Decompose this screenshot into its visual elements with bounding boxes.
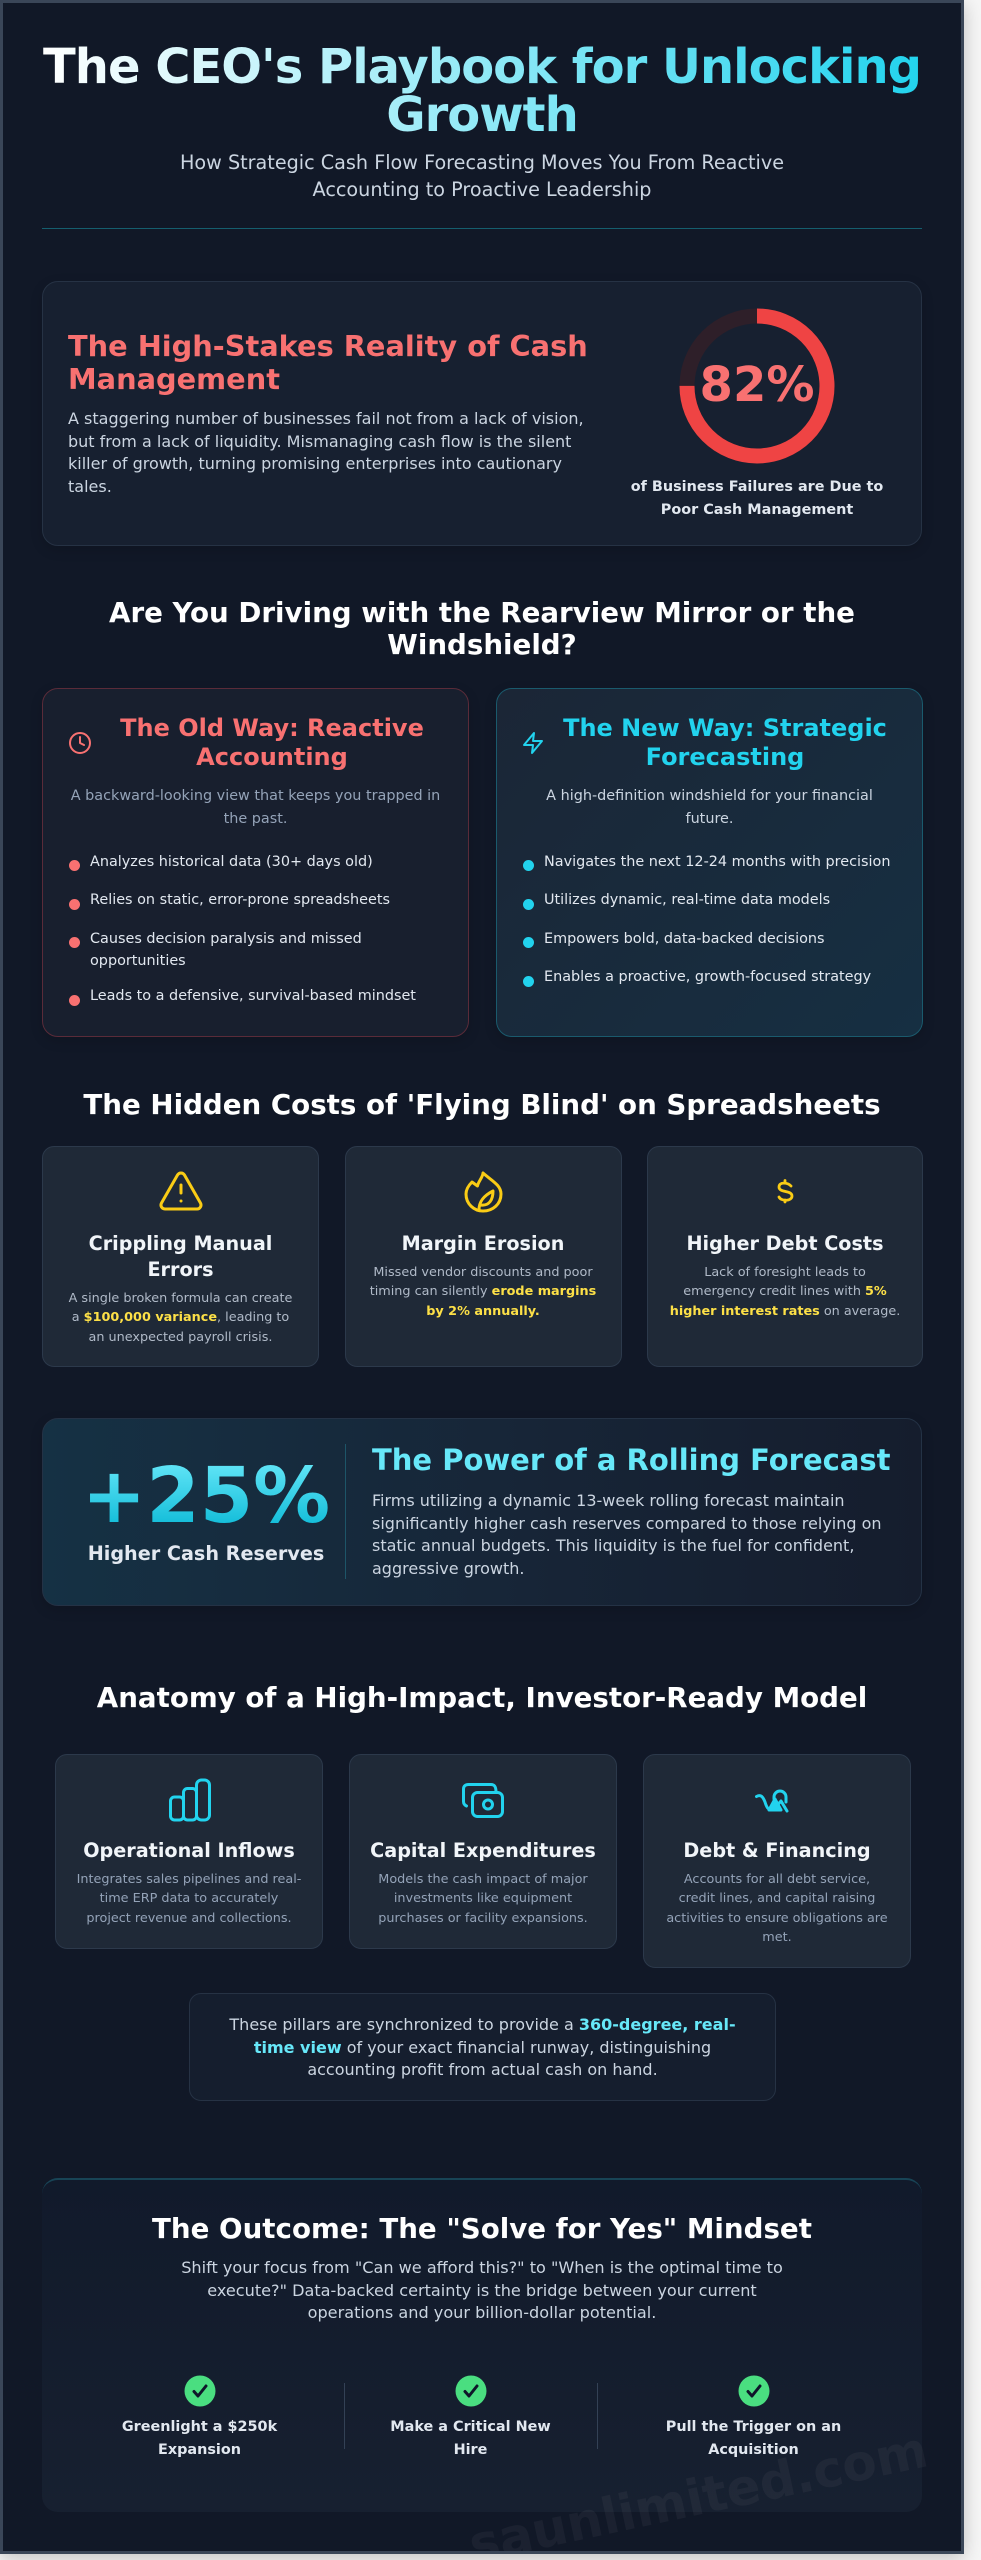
panel: outcome xyxy=(42,2178,922,2512)
label xyxy=(122,2419,278,2458)
text: capital expenditures: investments like equipment xyxy=(394,1891,572,1906)
item 2: Relies on static, error-prone spreadsheets xyxy=(90,892,390,908)
text: new way intro: A high-definition windshield for your financial xyxy=(546,788,873,804)
bullet 3 xyxy=(523,937,534,948)
text: debt costs: higher interest rates on average. xyxy=(670,1304,900,1319)
bullet 3 xyxy=(69,937,80,948)
text: debt and financing xyxy=(666,1872,888,1945)
panel: old way xyxy=(42,688,469,1037)
heading: new way: The New Way: Strategic xyxy=(563,714,887,742)
subtitle xyxy=(180,151,784,201)
text: operational inflows xyxy=(77,1872,301,1926)
heading: high-stakes: The High-Stakes Reality of Cash xyxy=(68,329,588,363)
icon: bar chart xyxy=(169,1778,211,1822)
text: debt and financing: credit lines, and capital raising xyxy=(679,1891,875,1906)
text: manual errors xyxy=(68,1291,292,1345)
heading: old way xyxy=(120,714,424,771)
heading: high-stakes xyxy=(68,329,588,396)
stat caption xyxy=(631,479,883,518)
text: high-stakes body: but from a lack of liquidity. Mismanaging cash flow is the silent xyxy=(68,432,571,451)
icon: lightning xyxy=(523,732,543,754)
item 4: Enables a proactive, growth-focused strategy xyxy=(544,969,871,985)
text: operational inflows: time ERP data to accurately xyxy=(100,1891,278,1906)
text: margin erosion xyxy=(370,1265,596,1319)
heading: new way: Forecasting xyxy=(646,743,804,771)
heading: anatomy: Anatomy of a High-Impact, Investor-Ready Model xyxy=(97,1681,867,1714)
icon: clock xyxy=(69,732,91,754)
panel: margin erosion xyxy=(344,1146,622,1367)
bullet 2 xyxy=(523,899,534,910)
callout: synchronized pillars: These pillars are synchronized to provide a 360-degree, real- xyxy=(229,2015,736,2034)
text: debt and financing: Accounts for all debt service, xyxy=(684,1872,870,1887)
item 3 xyxy=(90,931,362,969)
text: high-stakes body: tales. xyxy=(68,477,112,496)
text: debt and financing: met. xyxy=(762,1930,792,1945)
text: debt costs: Lack of foresight leads to xyxy=(704,1265,866,1280)
stat label: Higher Cash Reserves xyxy=(88,1542,324,1565)
bullet 1 xyxy=(69,860,80,871)
heading: manual errors: Errors xyxy=(147,1258,214,1281)
panel: capital expenditures xyxy=(349,1754,617,1949)
heading: old way: Accounting xyxy=(196,743,348,771)
item 2: Utilizes dynamic, real-time data models xyxy=(544,892,830,908)
outcome item: hire xyxy=(390,2376,551,2458)
text: high-stakes body xyxy=(68,409,584,496)
heading: manual errors xyxy=(89,1232,272,1281)
heading: manual errors: Crippling Manual xyxy=(89,1232,272,1255)
label xyxy=(666,2419,841,2458)
text: capital expenditures: Models the cash impact of major xyxy=(378,1872,588,1887)
panel: high-stakes reality xyxy=(42,281,922,546)
text: manual errors: A single broken formula can create xyxy=(69,1291,292,1306)
text: rolling forecast: significantly higher cash reserves compared to those relying on xyxy=(372,1514,882,1532)
item 3: Empowers bold, data-backed decisions xyxy=(544,931,825,947)
text: rolling forecast: Firms utilizing a dynamic 13-week rolling forecast maintain xyxy=(372,1491,845,1510)
outcome item: acquisition xyxy=(666,2376,841,2458)
icon: dollar xyxy=(778,1179,794,1204)
text: old way intro: A backward-looking view that keeps you trapped in xyxy=(71,788,440,804)
text: outcome: Shift your focus from "Can we afford this?" to "When is the optimal time to xyxy=(181,2258,783,2277)
donut chart: 82%: 82% xyxy=(700,357,814,413)
label: Make a Critical New xyxy=(390,2419,551,2435)
heading: rearview vs windshield: Are You Driving with the Rearview Mirror or the xyxy=(109,596,855,629)
text: outcome: execute?" Data-backed certainty is the bridge between your current xyxy=(207,2281,757,2300)
panel: debt and financing xyxy=(643,1754,911,1968)
heading: capital expenditures: Capital Expenditures xyxy=(370,1839,596,1862)
heading: rearview vs windshield xyxy=(109,596,855,661)
text: rolling forecast: static annual budgets. This liquidity is the fuel for confident, xyxy=(372,1536,854,1555)
title xyxy=(42,43,922,139)
list: old way xyxy=(69,854,416,1006)
subtitle: How Strategic Cash Flow Forecasting Moves You From Reactive xyxy=(180,151,784,174)
label: Pull the Trigger on an xyxy=(666,2419,841,2435)
text: new way intro: future. xyxy=(686,811,733,827)
panel: new way xyxy=(496,688,923,1037)
text: manual errors: a $100,000 variance, leading to xyxy=(72,1310,289,1325)
label xyxy=(390,2419,551,2458)
text: debt costs xyxy=(670,1265,900,1319)
title: The CEO's Playbook for Unlocking xyxy=(43,39,921,95)
icon: check xyxy=(184,2376,216,2406)
heading: debt costs: Higher Debt Costs xyxy=(686,1232,884,1255)
bullet 4 xyxy=(523,976,534,987)
text: capital expenditures: purchases or facility expansions. xyxy=(378,1911,588,1926)
icon: debt squiggle xyxy=(754,1790,789,1813)
text: operational inflows: Integrates sales pipelines and real- xyxy=(77,1872,301,1887)
bullet 4 xyxy=(69,995,80,1006)
bullet 2 xyxy=(69,899,80,910)
label: Acquisition xyxy=(708,2442,799,2458)
item 1: Analyzes historical data (30+ days old) xyxy=(90,854,373,870)
callout: synchronized pillars: accounting profit from actual cash on hand. xyxy=(307,2060,658,2079)
heading: operational inflows: Operational Inflows xyxy=(83,1839,295,1862)
icon: warning triangle xyxy=(159,1172,202,1210)
list: new way xyxy=(523,854,890,987)
text: debt costs: emergency credit lines with 5% xyxy=(683,1284,887,1299)
text: manual errors: an unexpected payroll crisis. xyxy=(89,1330,272,1345)
panel: manual errors xyxy=(42,1146,319,1367)
callout: synchronized pillars xyxy=(189,1993,776,2101)
label: Expansion xyxy=(158,2442,241,2458)
panel: debt costs xyxy=(647,1146,923,1367)
icon: flame xyxy=(464,1171,502,1212)
outcome item: expansion xyxy=(122,2376,278,2458)
text: margin erosion: timing can silently erode margins xyxy=(370,1284,596,1299)
heading: old way: The Old Way: Reactive xyxy=(120,714,424,742)
item 3: Causes decision paralysis and missed xyxy=(90,931,362,947)
text: new way intro xyxy=(546,788,873,827)
heading: high-stakes: Management xyxy=(68,362,280,396)
stat caption: of Business Failures are Due to xyxy=(631,479,883,495)
heading: outcome: The Outcome: The "Solve for Yes" Mindset xyxy=(152,2212,812,2245)
bullet 1 xyxy=(523,860,534,871)
text: outcome xyxy=(181,2258,783,2322)
text: operational inflows: project revenue and collections. xyxy=(86,1911,292,1926)
text: margin erosion: Missed vendor discounts and poor xyxy=(373,1265,593,1280)
text: high-stakes body: A staggering number of businesses fail not from a lack of vision, xyxy=(68,409,584,428)
donut chart: 82% xyxy=(680,308,834,464)
text: debt and financing: activities to ensure obligations are xyxy=(666,1911,888,1926)
heading: new way xyxy=(563,714,887,771)
heading: debt and financing: Debt & Financing xyxy=(683,1839,871,1862)
item 3: opportunities xyxy=(90,953,186,969)
subtitle: Accounting to Proactive Leadership xyxy=(313,178,651,201)
icon: check xyxy=(738,2376,770,2406)
text: outcome: operations and your billion-dollar potential. xyxy=(308,2303,656,2322)
text: rolling forecast xyxy=(372,1491,882,1578)
text: margin erosion: by 2% annually. xyxy=(426,1304,540,1319)
label: Greenlight a $250k xyxy=(122,2419,277,2435)
callout: synchronized pillars: time view of your exact financial runway, distinguishing xyxy=(254,2038,711,2056)
icon: check xyxy=(456,2376,486,2406)
text: high-stakes body: killer of growth, turning promising enterprises into cautionary xyxy=(68,454,562,473)
text: rolling forecast: aggressive growth. xyxy=(372,1558,524,1578)
icon: cash stack xyxy=(462,1783,504,1818)
panel: operational inflows xyxy=(55,1754,323,1949)
item 1: Navigates the next 12-24 months with precision xyxy=(544,854,890,870)
item 4: Leads to a defensive, survival-based mindset xyxy=(90,988,416,1004)
heading: rearview vs windshield: Windshield? xyxy=(387,628,577,661)
panel: rolling forecast xyxy=(42,1418,922,1606)
title: Growth xyxy=(386,87,578,143)
heading: margin erosion: Margin Erosion xyxy=(402,1232,564,1255)
stat caption: Poor Cash Management xyxy=(661,502,853,518)
stat: +25%: +25% xyxy=(82,1452,330,1541)
label: Hire xyxy=(454,2442,487,2458)
heading: hidden costs: The Hidden Costs of 'Flying Blind' on Spreadsheets xyxy=(83,1088,881,1121)
heading: rolling forecast: The Power of a Rolling Forecast xyxy=(372,1443,891,1477)
text: capital expenditures xyxy=(378,1872,588,1926)
text: old way intro xyxy=(70,788,440,827)
text: old way intro: the past. xyxy=(224,811,287,827)
